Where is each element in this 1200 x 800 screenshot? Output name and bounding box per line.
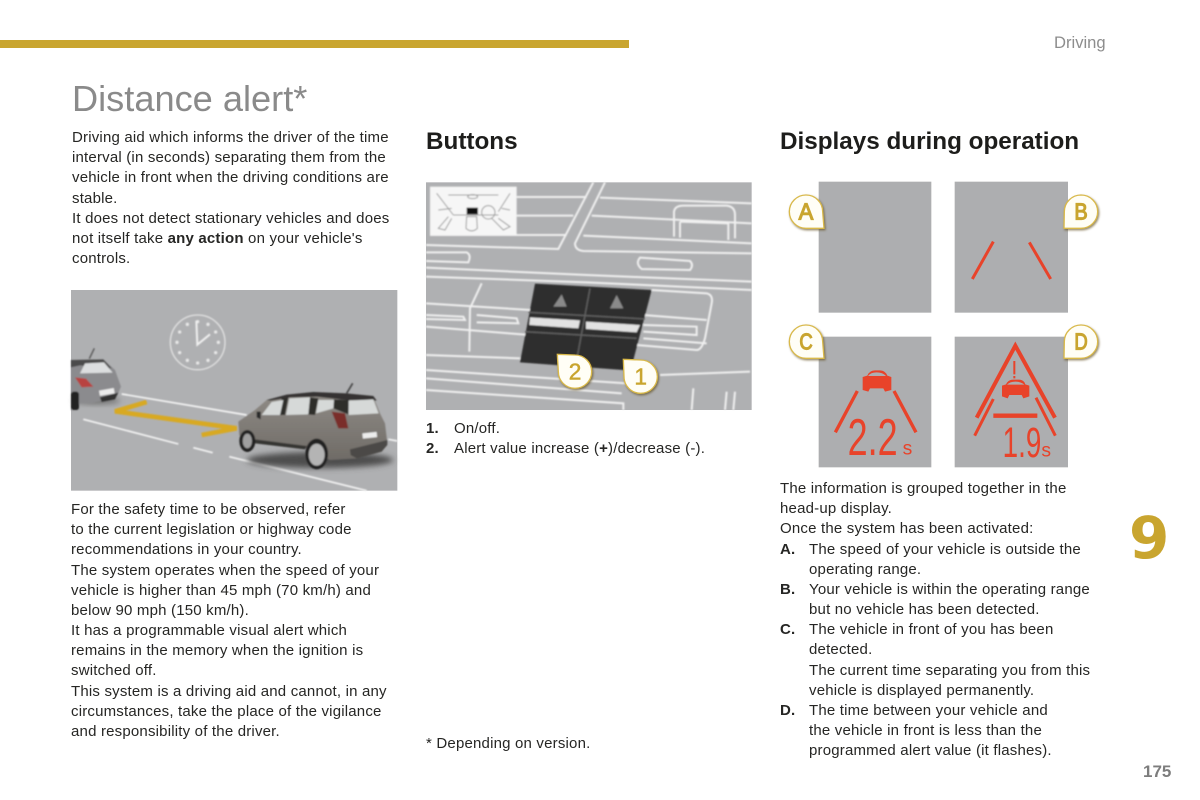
page number: 175 — [1143, 762, 1171, 781]
callout 2 — [557, 354, 592, 388]
intro text block: Driving aid which informs the driver of the time — [72, 129, 389, 146]
text block: display states: A. — [780, 541, 795, 558]
intro text block — [72, 129, 389, 267]
text block: safety and operation: For the safety time to be observed, refer — [71, 501, 346, 518]
intro text block: vehicle in front when the driving conditions are — [72, 169, 389, 186]
text block: display states: operating range. — [809, 561, 921, 578]
heading: Displays during operation: Displays during operation — [780, 128, 1079, 155]
callout 1 — [623, 359, 657, 393]
chapter number: 9 — [1129, 504, 1169, 572]
text block: safety and operation: to the current legislation or highway code — [71, 521, 352, 538]
text block: display states: The time between your vehicle and — [809, 702, 1048, 719]
text block: display states: vehicle is displayed permanently. — [809, 682, 1034, 699]
display B: B — [1074, 199, 1088, 225]
button list: 1. — [426, 420, 439, 437]
header gold bar — [0, 40, 629, 48]
button list — [426, 420, 705, 457]
text block: safety and operation: recommendations in your country. — [71, 541, 302, 558]
text block: display states: D. — [780, 702, 795, 719]
text block: display states: The information is grouped together in the — [780, 480, 1066, 497]
display D: D — [1074, 329, 1088, 355]
text block: safety and operation: vehicle is higher than 45 mph (70 km/h) and — [71, 582, 371, 599]
text block: display states: head-up display. — [780, 500, 892, 517]
text block: safety and operation: circumstances, take the place of the vigilance — [71, 703, 382, 720]
display C: s — [903, 438, 912, 459]
text block: display states: The current time separating you from this — [809, 662, 1090, 679]
car in front — [71, 348, 121, 411]
car behind — [238, 383, 393, 469]
display A: A — [799, 199, 814, 225]
text block: display states: programmed alert value (it flashes). — [809, 742, 1052, 759]
display A — [789, 182, 931, 313]
display C: 2.2 — [848, 409, 898, 467]
heading: Buttons: Buttons — [426, 128, 518, 155]
footnote: * Depending on version. — [426, 735, 590, 752]
text block: safety and operation: The system operates when the speed of your — [71, 562, 379, 579]
text block: display states: The vehicle in front of you has been — [809, 621, 1054, 638]
callout 1: 1 — [634, 363, 647, 389]
button list: Alert value increase (+)/decrease (-). — [454, 440, 705, 457]
title: Distance alert* — [72, 78, 307, 119]
illustration: distance between two cars — [70, 290, 398, 491]
text block: safety and operation: It has a programmable visual alert which — [71, 622, 347, 639]
display C — [789, 325, 931, 467]
text block: display states: Your vehicle is within the operating range — [809, 581, 1090, 598]
text block: display states: The speed of your vehicle is outside the — [809, 541, 1081, 558]
button list: 2. — [426, 440, 439, 457]
display D — [955, 325, 1098, 467]
text block: safety and operation — [71, 501, 387, 740]
intro text block: not itself take any action on your vehicle's — [72, 230, 363, 247]
text block: display states: detected. — [809, 641, 872, 658]
callout 2: 2 — [569, 358, 581, 384]
text block: display states — [780, 480, 1090, 759]
button list: On/off. — [454, 420, 500, 437]
display B — [955, 182, 1098, 313]
text block: safety and operation: and responsibility of the driver. — [71, 723, 280, 740]
text block: safety and operation: below 90 mph (150 km/h). — [71, 602, 249, 619]
text block: safety and operation: switched off. — [71, 662, 157, 679]
arrow: time gap — [115, 402, 237, 435]
display states A to D — [788, 182, 1101, 468]
display C: C — [799, 329, 813, 355]
dashboard outlines — [426, 182, 752, 410]
section label: Driving: Driving — [1054, 33, 1106, 52]
intro text block: controls. — [72, 250, 130, 267]
text block: display states: C. — [780, 621, 795, 638]
text block: display states: the vehicle in front is less than the — [809, 722, 1042, 739]
road markings — [83, 394, 397, 491]
text block: display states: but no vehicle has been detected. — [809, 601, 1040, 618]
text block: safety and operation: remains in the memory when the ignition is — [71, 642, 363, 659]
display D: 1.9 — [1003, 419, 1041, 467]
inset: dashboard location — [430, 187, 517, 235]
text block: display states: Once the system has been activated: — [780, 520, 1033, 537]
text block: safety and operation: This system is a driving aid and cannot, in any — [71, 683, 387, 700]
intro text block: interval (in seconds) separating them from the — [72, 149, 386, 166]
icon: clock — [170, 315, 225, 370]
display D: s — [1041, 441, 1051, 462]
switch block — [520, 284, 652, 370]
intro text block: stable. — [72, 190, 118, 207]
intro text block: It does not detect stationary vehicles and does — [72, 210, 389, 227]
text block: display states: B. — [780, 581, 795, 598]
illustration: button panel — [426, 182, 752, 410]
